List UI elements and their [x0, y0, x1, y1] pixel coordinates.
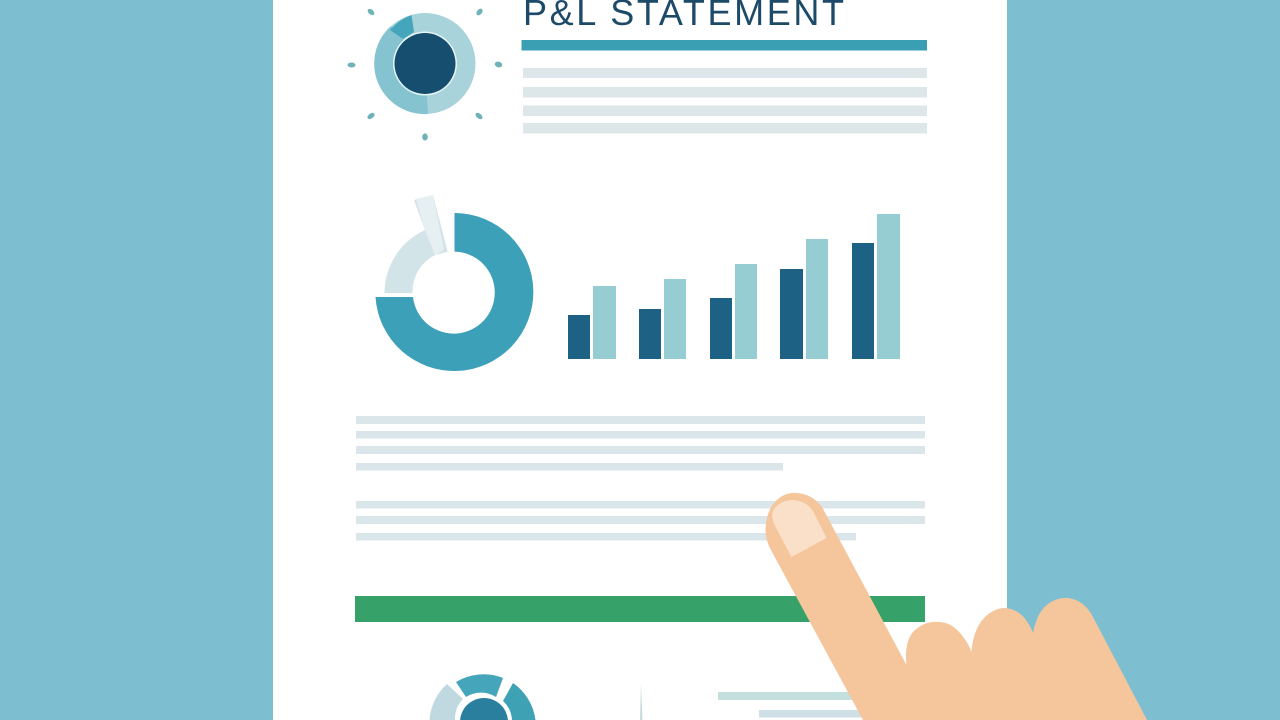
- text lines: bottom right: [718, 692, 864, 718]
- header text lines: [523, 68, 927, 134]
- panel: paper document: [273, 0, 1007, 720]
- divider line: bottom axis: [640, 683, 642, 720]
- icon: fingernail: [772, 500, 826, 557]
- icon: top gauge donut: [348, 7, 503, 141]
- icon: bottom donut: [430, 674, 536, 720]
- icon: pointing hand: [765, 493, 1147, 720]
- chart: bar chart: [568, 214, 900, 359]
- text block: first paragraph lines: [356, 416, 925, 470]
- highlighted total bar: [355, 596, 925, 622]
- chart: main donut: [376, 195, 533, 371]
- text block: second paragraph lines: [356, 501, 925, 540]
- title underline bar: [522, 40, 927, 50]
